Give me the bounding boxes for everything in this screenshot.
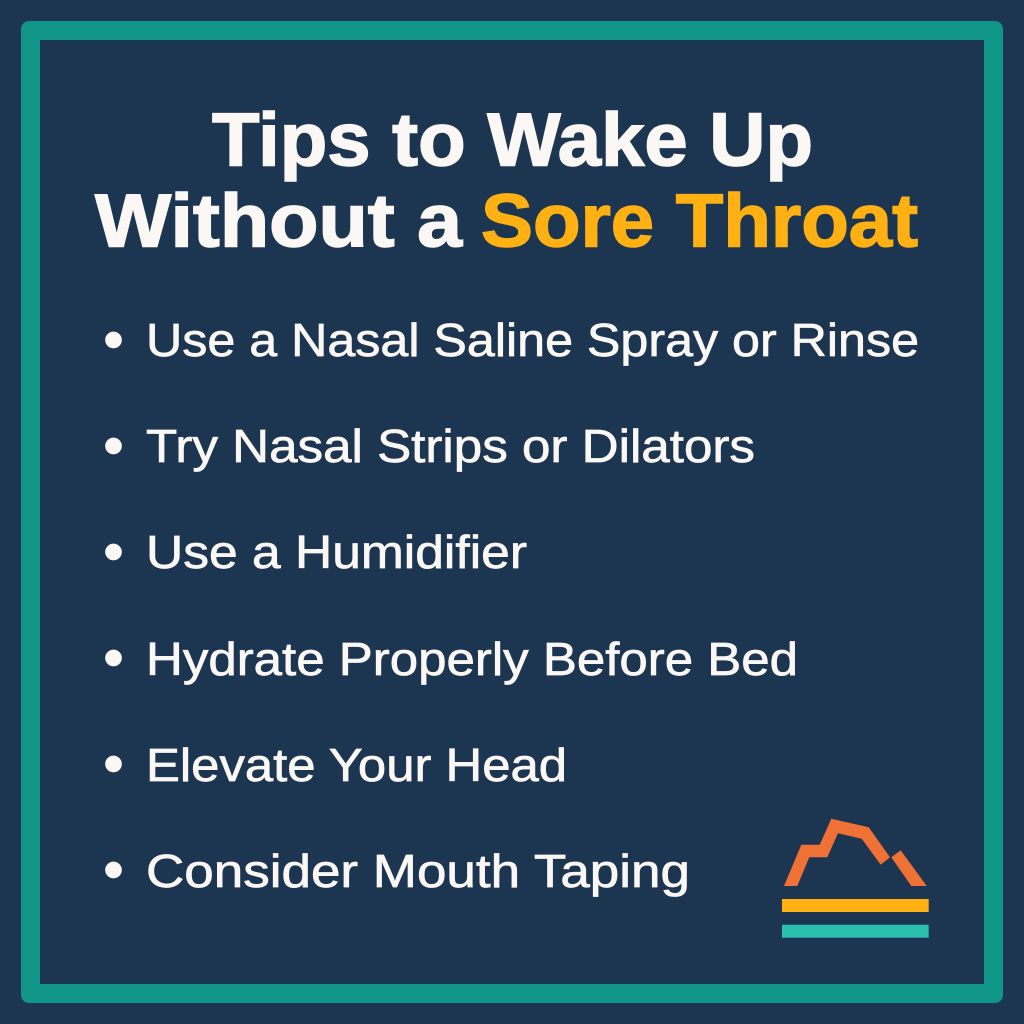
tip 3: Use a Humidifier xyxy=(146,526,527,578)
logo: mountain with two bars xyxy=(782,819,929,938)
tip 2: Try Nasal Strips or Dilators xyxy=(146,420,755,472)
title: Without a xyxy=(95,178,463,262)
title xyxy=(95,98,918,262)
tip 4: Hydrate Properly Before Bed xyxy=(146,633,798,685)
tip 5: Elevate Your Head xyxy=(146,739,567,791)
title: Tips to Wake Up xyxy=(212,98,813,182)
list of tips xyxy=(106,314,919,897)
title: Sore Throat xyxy=(481,178,918,262)
tip 6: Consider Mouth Taping xyxy=(146,845,690,897)
tip 1: Use a Nasal Saline Spray or Rinse xyxy=(146,314,919,366)
